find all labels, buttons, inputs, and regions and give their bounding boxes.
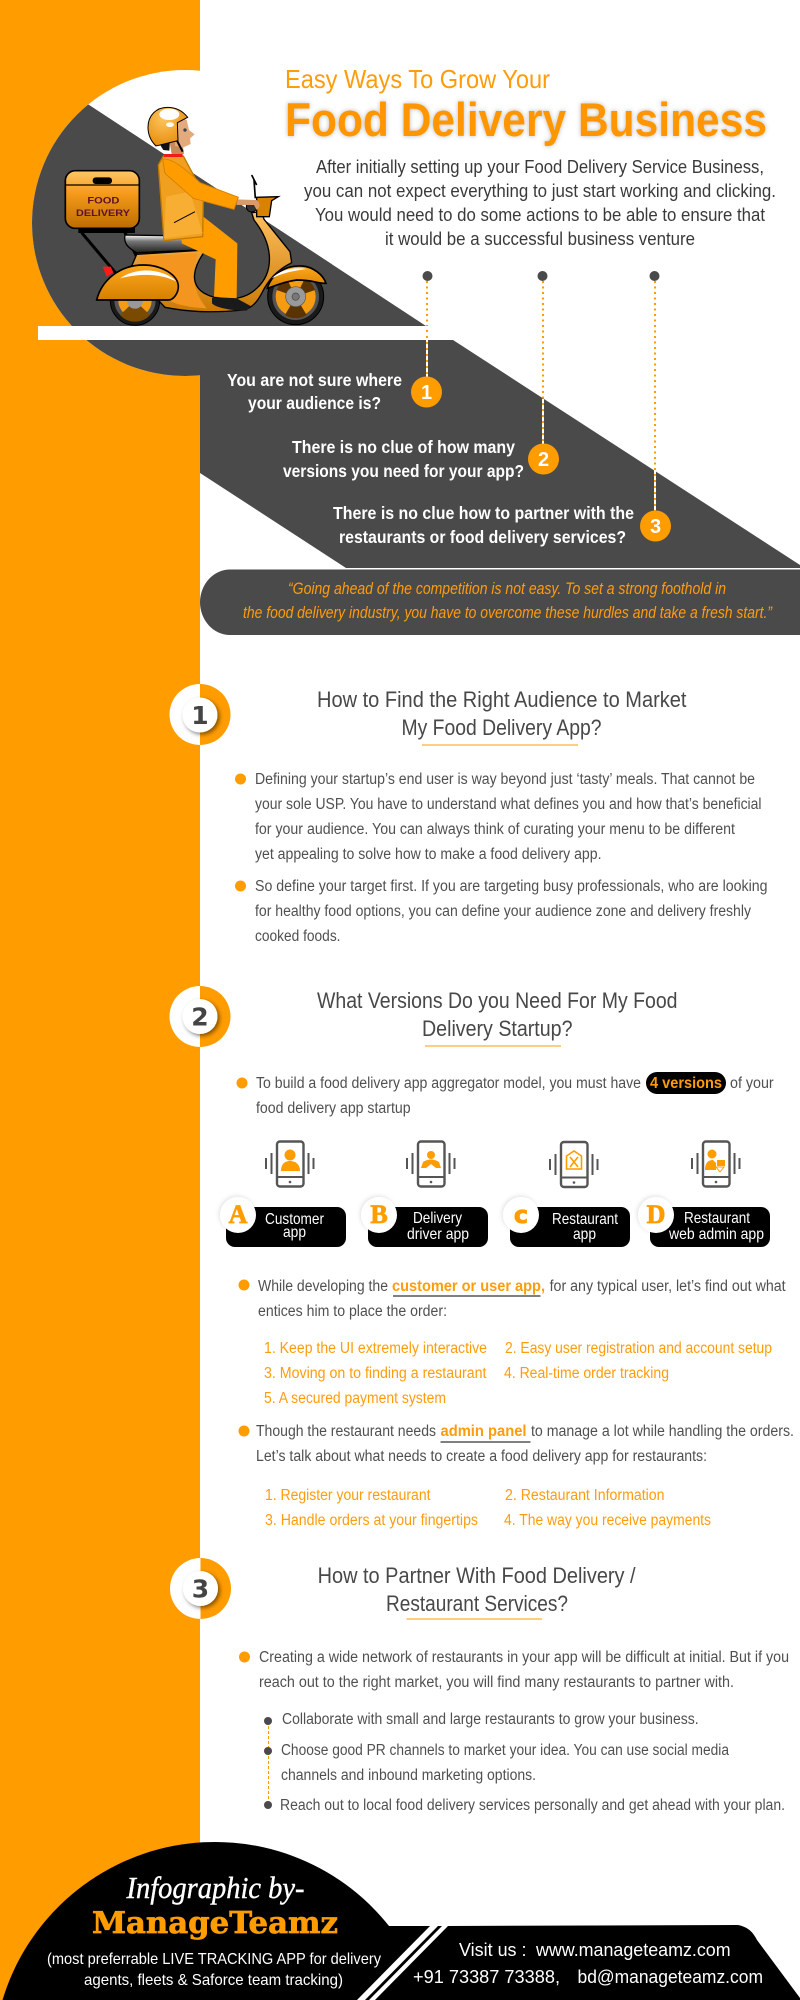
- section 3 bullet: [239, 1649, 789, 1691]
- delivery box: FOOD: [87, 195, 120, 205]
- quote banner: [200, 570, 800, 635]
- footer contact details: bd@manageteamz.com: [578, 1967, 763, 1987]
- question 1: 1: [421, 382, 432, 404]
- section 2 badge: 2: [191, 1002, 209, 1032]
- footer credit: Infographic by-: [126, 1870, 304, 1905]
- label C: restaurant app: c: [514, 1201, 528, 1229]
- restaurant list: 3. Handle orders at your fingertips: [265, 1512, 478, 1529]
- admin panel bullet: admin panel: [440, 1423, 526, 1440]
- question 3: [333, 503, 671, 547]
- intro paragraph: You would need to do some actions to be able to ensure that: [315, 205, 765, 225]
- label B: delivery driver app: B: [370, 1200, 388, 1229]
- seat: [125, 235, 198, 253]
- section 1 bullet 1: [235, 771, 762, 863]
- icon: restaurant app phone: [550, 1142, 598, 1187]
- section 3 sub-list: [264, 1711, 785, 1814]
- footer credit: agents, fleets & Saforce team tracking): [84, 1972, 343, 1989]
- section 2 badge: [170, 986, 230, 1047]
- scooter body: [130, 212, 292, 312]
- intro paragraph: After initially setting up your Food Delivery Service Business,: [316, 157, 764, 177]
- question 3: restaurants or food delivery services?: [339, 527, 626, 547]
- label C: restaurant app: Restaurant: [552, 1211, 618, 1228]
- section 2 heading: Delivery Startup?: [422, 1016, 572, 1041]
- section 1 bullet 2: So define your target first. If you are targeting busy professionals, who are looking: [255, 878, 768, 895]
- section 1 badge: [170, 684, 230, 745]
- customer app bullet: entices him to place the order:: [258, 1303, 447, 1320]
- section 2 intro bullet: To build a food delivery app aggregator model, you must have: [256, 1075, 641, 1092]
- question 1: your audience is?: [248, 393, 381, 413]
- quote banner: “Going ahead of the competition is not easy. To set a strong foothold in: [288, 580, 726, 598]
- front fender highlight: [272, 268, 307, 278]
- customer app list: 1. Keep the UI extremely interactive: [264, 1340, 487, 1357]
- rack struts: [82, 233, 137, 277]
- label B: delivery driver app: driver app: [407, 1226, 469, 1243]
- customer app list: [264, 1340, 772, 1407]
- label C: restaurant app: app: [573, 1226, 596, 1243]
- footer contact details: +91 73387 73388,: [413, 1967, 560, 1987]
- hero backdrop: [32, 70, 427, 376]
- customer app list: 5. A secured payment system: [264, 1390, 446, 1407]
- intro paragraph: [304, 157, 776, 249]
- rider shoe: [212, 298, 251, 311]
- question 3: There is no clue how to partner with the: [333, 503, 634, 523]
- customer app bullet: While developing the: [258, 1278, 388, 1295]
- label D: restaurant web admin app: [638, 1197, 770, 1247]
- front fender: [267, 266, 326, 288]
- customer app list: 3. Moving on to finding a restaurant: [264, 1365, 487, 1382]
- footer contact details: www.manageteamz.com: [535, 1940, 731, 1960]
- rider head: [148, 107, 195, 154]
- section 1 heading: How to Find the Right Audience to Market: [317, 687, 687, 712]
- section 3 sub-list: Collaborate with small and large restaurants to grow your business.: [282, 1711, 699, 1728]
- section 2 intro bullet: of your: [730, 1075, 774, 1092]
- customer app list: 4. Real-time order tracking: [504, 1365, 669, 1382]
- label B: delivery driver app: Delivery: [413, 1210, 462, 1227]
- restaurant list: 1. Register your restaurant: [265, 1487, 431, 1504]
- label A: customer app: app: [283, 1224, 306, 1241]
- question 2: 2: [538, 449, 549, 471]
- section 3 badge: [170, 1558, 231, 1619]
- footer contact details: [413, 1940, 763, 1987]
- side panel: [140, 253, 207, 308]
- section 1 bullet 2: cooked foods.: [255, 928, 340, 945]
- section 3 sub-list: Choose good PR channels to market your idea. You can use social media: [281, 1742, 729, 1759]
- section 2 intro bullet: food delivery app startup: [256, 1100, 411, 1117]
- section 3 heading: Restaurant Services?: [386, 1591, 568, 1616]
- fender highlight: [120, 271, 177, 282]
- label A: customer app: [220, 1197, 346, 1247]
- section 2 heading: [317, 988, 678, 1046]
- rider collar: [164, 154, 183, 157]
- label D: restaurant web admin app: web admin app: [668, 1226, 764, 1243]
- section 1 heading: My Food Delivery App?: [402, 715, 602, 740]
- admin panel bullet: Though the restaurant needs: [256, 1423, 436, 1440]
- label B: delivery driver app: [361, 1197, 488, 1247]
- section 1 bullet 1: yet appealing to solve how to make a food delivery app.: [255, 846, 602, 863]
- rider arm: [163, 159, 238, 209]
- icon: delivery driver app phone: [407, 1142, 454, 1186]
- footer dome and contact band: [2, 1842, 800, 2000]
- section 3 heading: How to Partner With Food Delivery /: [318, 1563, 636, 1588]
- title line 1: Easy Ways To Grow Your: [285, 64, 550, 94]
- question 2: versions you need for your app?: [283, 461, 524, 481]
- highlight pill: 4 versions: 4 versions: [650, 1075, 722, 1092]
- delivery box: [65, 171, 139, 233]
- section 1 bullet 1: for your audience. You can always think of curating your menu to be different: [255, 821, 736, 838]
- customer app bullet: [238, 1278, 786, 1320]
- connector dots and dotted lines: [422, 271, 660, 512]
- footer credit: ManageTeamz: [92, 1906, 338, 1941]
- customer app list: 2. Easy user registration and account setup: [505, 1340, 772, 1357]
- section 2 heading: What Versions Do you Need For My Food: [317, 988, 678, 1013]
- section 1 heading: [317, 687, 687, 745]
- rear fender: [97, 265, 178, 300]
- question 1: You are not sure where: [227, 370, 402, 390]
- section 2 intro bullet: [236, 1072, 774, 1117]
- label A: customer app: A: [229, 1200, 248, 1229]
- label D: restaurant web admin app: Restaurant: [684, 1210, 750, 1227]
- handlebar: [237, 175, 278, 217]
- orange side bar: [0, 0, 200, 2000]
- footer credit: [47, 1870, 381, 1989]
- icon: customer app phone: [266, 1142, 314, 1186]
- restaurant list: [265, 1487, 711, 1529]
- restaurant list: 2. Restaurant Information: [505, 1487, 664, 1504]
- icon: restaurant web admin phone: [692, 1142, 740, 1186]
- rear wheel: [110, 276, 160, 325]
- customer app bullet: for any typical user, let’s find out what: [550, 1278, 786, 1295]
- admin panel bullet: Let’s talk about what needs to create a food delivery app for restaurants:: [256, 1448, 707, 1465]
- delivery box: DELIVERY: [76, 208, 131, 218]
- section 3 badge: 3: [192, 1574, 209, 1604]
- question 2: There is no clue of how many: [292, 437, 515, 457]
- question 3: 3: [650, 516, 661, 538]
- section 1 bullet 1: Defining your startup’s end user is way beyond just ‘tasty’ meals. That cannot be: [255, 771, 755, 788]
- customer app bullet: customer or user app,: [392, 1278, 545, 1295]
- label D: restaurant web admin app: D: [647, 1200, 665, 1229]
- illustration: delivery rider on scooter: [65, 107, 326, 325]
- section 3 bullet: reach out to the right market, you will find many restaurants to partner with.: [259, 1674, 734, 1691]
- admin panel bullet: [238, 1423, 794, 1465]
- jacket pocket: [164, 192, 203, 238]
- restaurant list: 4. The way you receive payments: [504, 1512, 711, 1529]
- section 3 sub-list: channels and inbound marketing options.: [281, 1767, 536, 1784]
- label C: restaurant app: [503, 1197, 630, 1247]
- section 1 bullet 2: for healthy food options, you can define your audience zone and delivery freshly: [255, 903, 751, 920]
- footer credit: (most preferrable LIVE TRACKING APP for delivery: [47, 1951, 381, 1968]
- section 3 heading: [318, 1563, 636, 1619]
- rider jacket: [158, 156, 203, 241]
- section 1 bullet 2: [235, 878, 768, 945]
- intro paragraph: it would be a successful business venture: [385, 229, 695, 249]
- footer contact details: Visit us :: [459, 1940, 526, 1960]
- label A: customer app: Customer: [265, 1211, 325, 1228]
- question 1: [227, 370, 442, 413]
- panel: dark diagonal band: [200, 340, 800, 568]
- title: [285, 64, 767, 146]
- question 2: [283, 437, 559, 481]
- tail light: [103, 267, 113, 277]
- rider trousers: [182, 217, 237, 298]
- intro paragraph: you can not expect everything to just start working and clicking.: [304, 181, 776, 201]
- front wheel: [268, 269, 324, 325]
- section 1 badge: 1: [191, 701, 209, 730]
